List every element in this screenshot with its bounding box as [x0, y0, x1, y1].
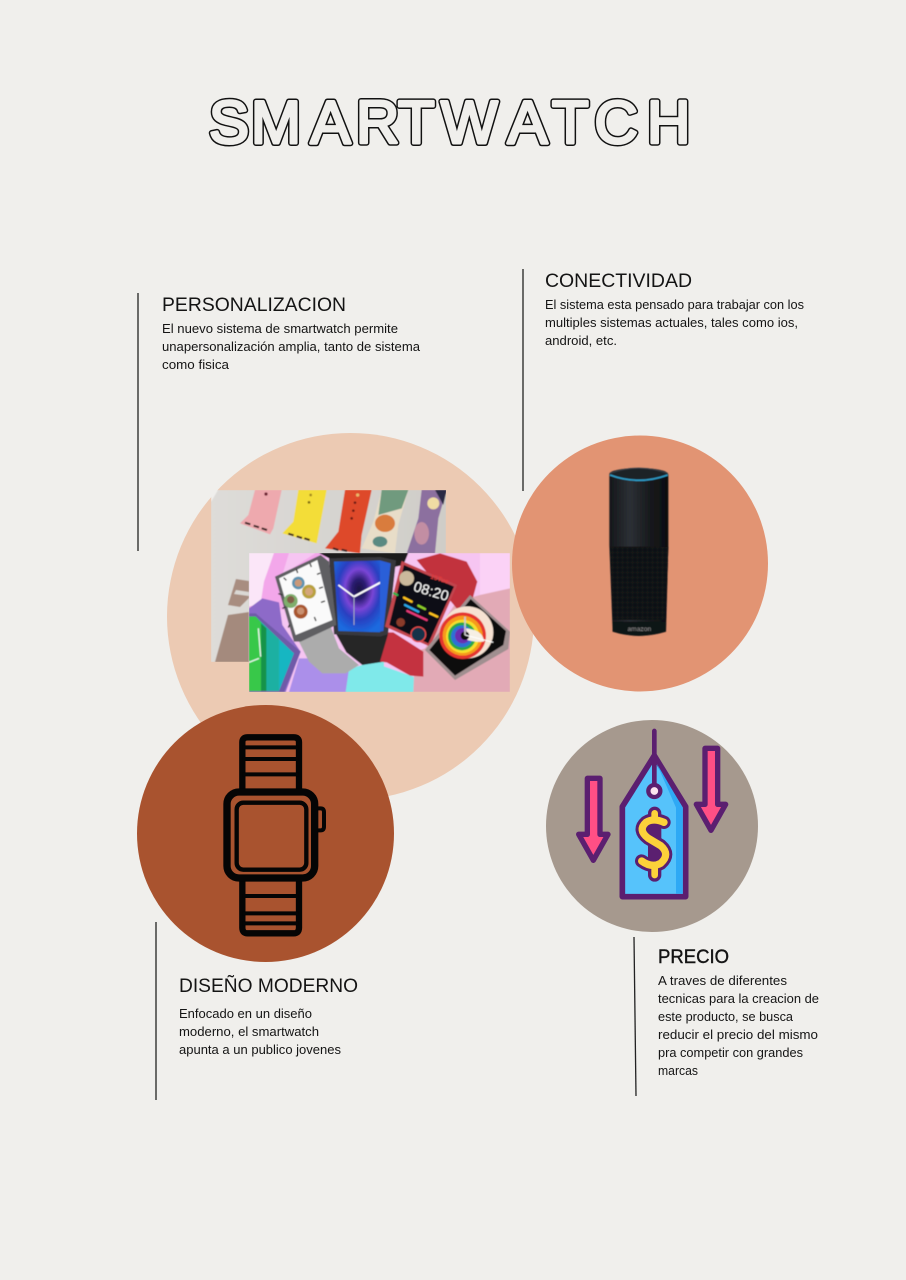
crown — [317, 808, 324, 830]
circle: peach backdrop — [167, 433, 534, 800]
right half of photo — [380, 553, 510, 692]
left arrow — [579, 778, 608, 860]
heading: personalizacion: PERSONALIZACION — [162, 295, 346, 316]
icon: smart speaker — [609, 468, 668, 636]
vertical rule: personalizacion — [137, 293, 139, 551]
panel: precio — [634, 937, 819, 1096]
text block: diseno moderno: Enfocado en un diseño — [179, 1006, 312, 1021]
top strap — [242, 737, 299, 790]
icon: smart speaker: amazon — [627, 626, 651, 633]
heading: diseno moderno: DISEÑO MODERNO — [179, 975, 358, 997]
panel: personalizacion — [138, 293, 421, 551]
title: SMARTWATCH — [209, 89, 690, 156]
heading: precio: PRECIO — [658, 947, 729, 968]
infographic page — [137, 98, 818, 1100]
text block: precio: este producto, se busca — [658, 1009, 794, 1024]
case — [227, 792, 315, 878]
circle: grey — [546, 720, 758, 932]
text block: conectividad: multiples sistemas actuales, tales como ios, — [545, 315, 798, 330]
text block: precio: tecnicas para la creacion de — [658, 991, 819, 1006]
right half of photo: 08:20 — [411, 579, 450, 605]
text block: conectividad: android, etc. — [545, 333, 617, 348]
dollar sign — [642, 813, 666, 875]
text block: personalizacion: El nuevo sistema de smartwatch permite — [162, 321, 398, 336]
text block: diseno moderno: moderno, el smartwatch — [179, 1024, 319, 1039]
panel: conectividad — [523, 269, 804, 491]
left half of photo — [249, 553, 384, 692]
string — [647, 731, 661, 783]
title: SMARTWATCH — [209, 89, 690, 156]
text block: precio: reducir el precio del mismo — [658, 1027, 818, 1042]
text block: precio: pra competir con grandes — [658, 1045, 803, 1060]
bottom strap — [242, 878, 299, 933]
text block: personalizacion: como fisica — [162, 357, 230, 372]
photo: smartwatches — [249, 553, 510, 692]
tag — [622, 756, 686, 897]
heading: conectividad: CONECTIVIDAD — [545, 271, 692, 292]
text block: diseno moderno — [179, 1006, 341, 1057]
text block: conectividad — [545, 297, 804, 348]
text block: precio: A traves de diferentes — [658, 973, 788, 988]
text block: diseno moderno: apunta a un publico jovenes — [179, 1042, 341, 1057]
panel: diseno moderno — [156, 922, 358, 1100]
text block: conectividad: El sistema esta pensado para trabajar con los — [545, 297, 804, 312]
right arrow — [696, 748, 726, 830]
circle: orange — [512, 436, 768, 692]
photo: watch bands — [211, 490, 447, 662]
vertical rule: conectividad — [522, 269, 524, 491]
text block: precio: marcas — [658, 1063, 698, 1078]
vertical rule: diseno — [155, 922, 157, 1100]
icon: watch — [227, 737, 324, 933]
icon: price tag with falling arrows — [579, 731, 726, 897]
eyelet — [648, 785, 660, 797]
text block: personalizacion — [162, 321, 421, 372]
vertical rule: precio — [634, 937, 636, 1096]
text block: personalizacion: unapersonalización amplia, tanto de sistema — [162, 339, 421, 354]
circle: brown — [137, 705, 394, 962]
right half of photo: 15Tue — [429, 574, 450, 586]
screen — [237, 803, 306, 870]
text block: precio — [658, 973, 819, 1078]
